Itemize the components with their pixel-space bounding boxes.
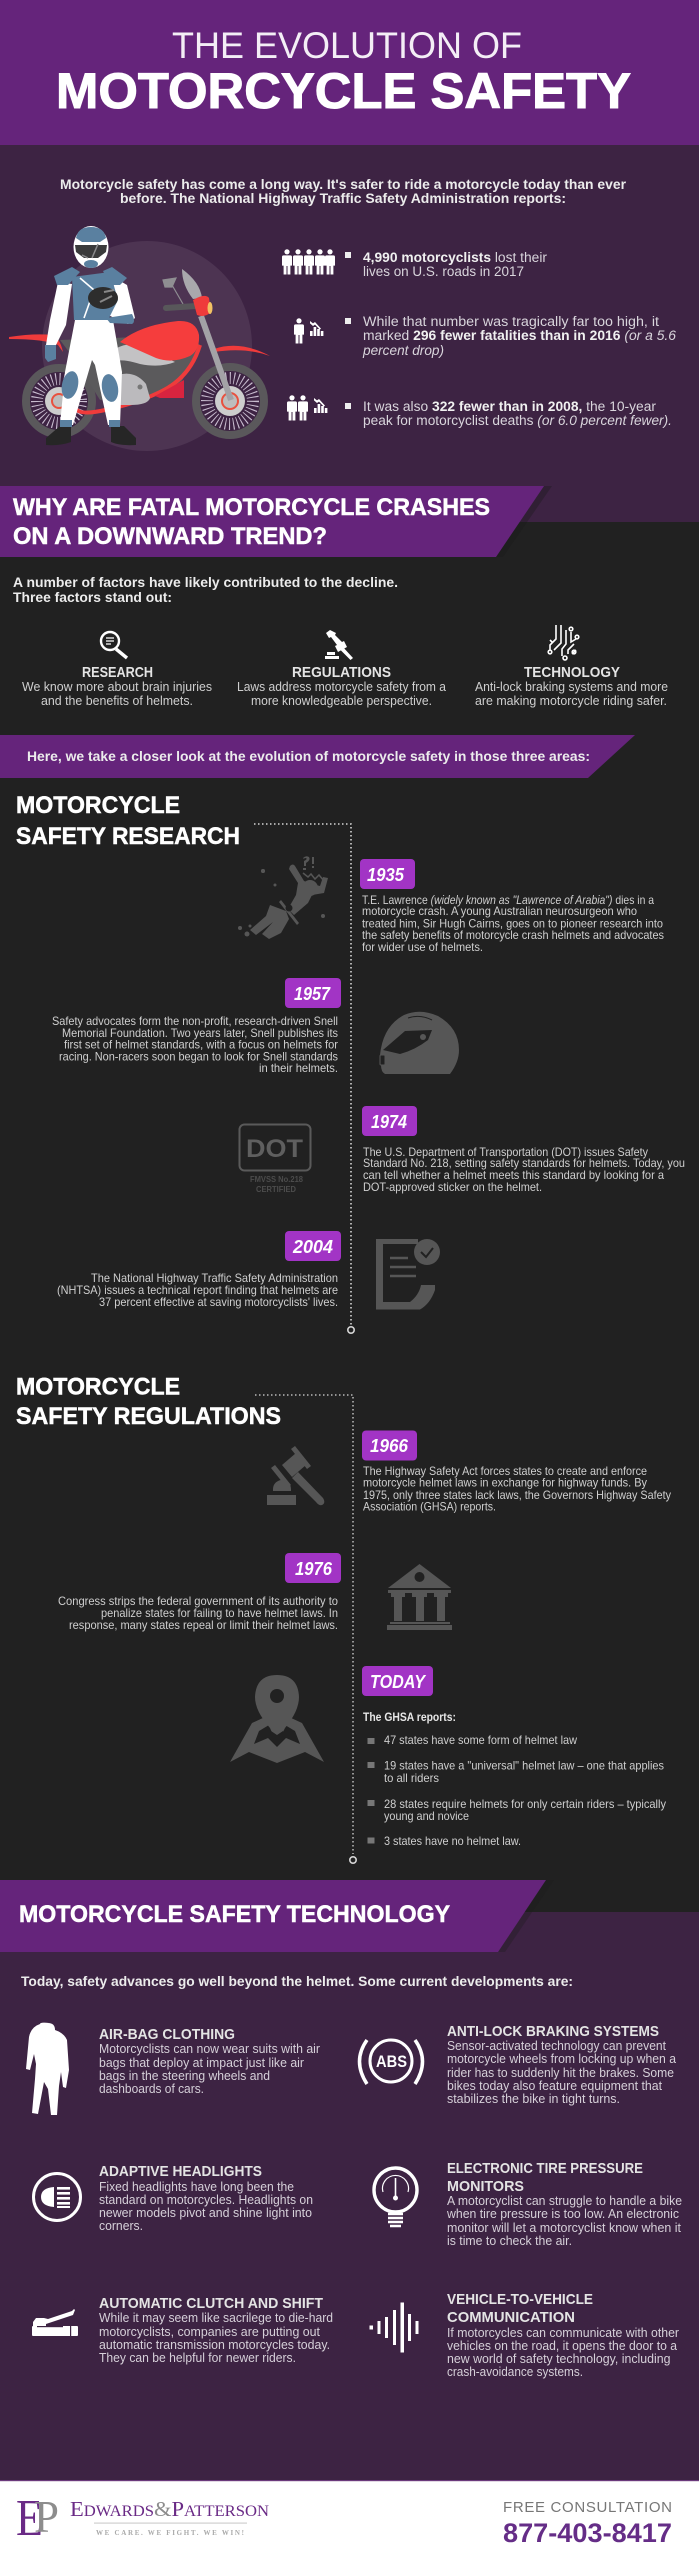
intro text: Motorcycle safety has come a long way. It's safer to ride a motorcycle today than ever	[60, 176, 627, 192]
bullet list: 47 states have some form of helmet law	[384, 1733, 577, 1747]
footer panel	[0, 2480, 699, 2560]
heading: motorcycle safety research	[16, 792, 240, 850]
icon: gavel	[325, 630, 353, 660]
handlebar	[166, 306, 196, 308]
logo: P	[34, 2491, 59, 2542]
icon: riding suit	[26, 2023, 69, 2115]
front fender	[214, 346, 270, 356]
icon: pressure gauge	[374, 2168, 417, 2226]
rider boots	[46, 426, 71, 445]
item: anti-lock braking systems: motorcycle wheels from locking up when a	[447, 2051, 677, 2066]
stat: 4,990 motorcyclists: lives on U.S. roads in 2017	[363, 264, 524, 279]
shoulders	[54, 267, 80, 285]
factor: regulations: Laws address motorcycle safety from a	[237, 680, 446, 694]
mirror	[163, 278, 183, 304]
bullet list: to all riders	[384, 1771, 439, 1785]
entry: 1966: Association (GHSA) reports.	[363, 1500, 496, 1514]
item: automatic clutch and shift: automatic transmission motorcycles today.	[99, 2337, 330, 2352]
contact	[503, 2499, 672, 2548]
heading: motorcycle safety regulations: MOTORCYCLE	[16, 1374, 180, 1400]
frame	[60, 335, 200, 400]
stat: 4,990 motorcyclists: 4,990 motorcyclists lost their	[363, 250, 548, 265]
research timeline line	[254, 824, 354, 1333]
item: vehicle-to-vehicle communication: If motorcycles can communicate with other	[447, 2325, 680, 2340]
logo: EDWARDS&PATTERSON	[70, 2497, 269, 2521]
entry: 1935: motorcycle crash. A young Australian neurosurgeon who	[362, 904, 637, 918]
banner: closer look: Here, we take a closer look at the evolution of motorcycle safety in those three areas:	[27, 748, 590, 764]
entry: 2004: 37 percent effective at saving motorcyclists' lives.	[99, 1295, 338, 1309]
windshield	[182, 269, 202, 299]
factor: research: and the benefits of helmets.	[41, 694, 193, 708]
factor: research: RESEARCH	[82, 664, 153, 681]
bullet list: 28 states require helmets for only certain riders – typically	[384, 1797, 666, 1811]
rider legs	[60, 320, 122, 425]
entry: 1957: first set of helmet standards, with a focus on helmets for	[64, 1038, 338, 1052]
item: adaptive headlights: ADAPTIVE HEADLIGHTS	[99, 2163, 262, 2180]
entry: today: TODAY	[370, 1672, 427, 1692]
entry: 1976	[58, 1553, 341, 1632]
icon: headlight	[34, 2174, 80, 2220]
icon: clutch lever	[32, 2309, 78, 2336]
left arm	[46, 282, 72, 345]
stat: 322 fewer than 2008	[287, 395, 672, 428]
heading: motorcycle safety research: MOTORCYCLE	[16, 792, 180, 819]
icon: ABS: ABS	[376, 2052, 407, 2071]
factor: technology	[475, 625, 668, 708]
item: electronic tire pressure monitors: ELECTRONIC TIRE PRESSURE	[447, 2160, 643, 2177]
icon: document with check	[376, 1239, 440, 1310]
entry: 1976: 1976	[295, 1559, 333, 1579]
heading: motorcycle safety research: SAFETY RESEARCH	[16, 823, 240, 850]
exhaust and red frame tube	[75, 345, 200, 413]
contact: 877-403-8417	[503, 2518, 672, 2548]
item: electronic tire pressure monitors: MONITORS	[447, 2178, 524, 2195]
logo: E	[16, 2490, 43, 2547]
icon: map pin	[230, 1675, 324, 1763]
logo	[16, 2490, 269, 2547]
item: air-bag clothing: AIR-BAG CLOTHING	[99, 2026, 235, 2043]
right arm	[108, 278, 135, 324]
logo: WE CARE. WE FIGHT. WE WIN!	[96, 2529, 244, 2537]
factor: technology: are making motorcycle riding safer.	[475, 694, 667, 708]
icon: gavel	[267, 1446, 324, 1505]
stat: 296 fewer fatalities	[294, 314, 676, 358]
item: anti-lock braking systems: bikes today also feature equipment that	[447, 2078, 662, 2093]
entry: 1966: 1975, only three states lack laws, the Governors Highway Safety	[363, 1488, 671, 1502]
banner: why are fatal crashes down: ON A DOWNWARD TREND?	[13, 523, 327, 550]
entry: 1935: the safety benefits of motorcycle crash helmets and advocates	[362, 928, 664, 942]
bullet list: 19 states have a "universal" helmet law – one that applies	[384, 1758, 664, 1772]
engine	[116, 374, 150, 405]
item: adaptive headlights: Fixed headlights have long been the	[99, 2179, 294, 2194]
icon: signal wave	[370, 2302, 418, 2352]
stat: 296 fewer fatalities: While that number was tragically far too high, it	[363, 314, 659, 329]
helmet	[74, 226, 108, 268]
forearm	[106, 314, 134, 324]
illustration: rider and motorcycle	[9, 226, 270, 451]
rear fender	[9, 334, 63, 352]
entry: 1976: response, many states repeal or limit their helmet laws.	[69, 1618, 338, 1632]
item: vehicle-to-vehicle communication: vehicles on the road, it opens the door to a	[447, 2338, 678, 2353]
item: electronic tire pressure monitors: monitor will let a motorcyclist know when it	[447, 2220, 681, 2235]
item: anti-lock braking systems: rider has to suddenly hit the brakes. Some	[447, 2065, 674, 2080]
factor: technology: Anti-lock braking systems and more	[475, 680, 668, 694]
knee pads	[59, 370, 81, 400]
item: electronic tire pressure monitors: when tire pressure is too low. An electronic	[446, 2206, 679, 2221]
bullet list: young and novice	[384, 1809, 469, 1823]
item: automatic clutch and shift: motorcyclists, companies are putting out	[99, 2324, 320, 2339]
icon: DOT sticker: FMVSS No.218	[250, 1175, 304, 1184]
icon: five people	[282, 249, 335, 274]
title line 2: MOTORCYCLE SAFETY	[56, 63, 631, 119]
item: adaptive headlights	[34, 2163, 313, 2233]
entry: 1957: Safety advocates form the non-profit, research-driven Snell	[52, 1014, 338, 1028]
stat: 322 fewer than 2008: peak for motorcyclist deaths (or 6.0 percent fewer).	[363, 413, 672, 428]
entry: 1974	[362, 1106, 685, 1194]
fuel tank	[120, 321, 199, 361]
entry: 1935: 1935	[367, 865, 405, 885]
item: electronic tire pressure monitors: is time to check the air.	[447, 2233, 572, 2248]
item: automatic clutch and shift	[32, 2295, 333, 2365]
torso	[72, 272, 118, 320]
factor: research: We know more about brain injuries	[22, 680, 212, 694]
item: air-bag clothing: bags in the steering wheels and	[99, 2068, 270, 2083]
entry: 1974: can tell whether a helmet meets this standard by looking for a	[363, 1168, 664, 1182]
banner: why are fatal crashes down	[0, 486, 552, 557]
intro text	[60, 176, 627, 206]
entry: today	[362, 1666, 666, 1848]
item: vehicle-to-vehicle communication	[370, 2291, 680, 2379]
entry: 1974: The U.S. Department of Transportation (DOT) issues Safety	[363, 1145, 648, 1159]
entry: 1935	[360, 859, 664, 954]
icon: two people with falling chart	[287, 395, 327, 420]
factor: regulations: more knowledgeable perspective.	[251, 694, 432, 708]
item: anti-lock braking systems: Sensor-activated technology can prevent	[447, 2038, 666, 2053]
item: automatic clutch and shift: AUTOMATIC CLUTCH AND SHIFT	[99, 2295, 323, 2312]
item: electronic tire pressure monitors	[374, 2160, 682, 2248]
item: anti-lock braking systems: stabilizes the bike in tight turns.	[447, 2091, 620, 2106]
icon: helmet	[380, 1012, 459, 1074]
entry: 1957: racing. Non-racers soon began to look for Snell standards	[59, 1050, 338, 1064]
background: dark timeline section	[0, 522, 699, 1912]
entry: 1966: 1966	[370, 1436, 409, 1456]
entry: 1966	[362, 1430, 671, 1514]
entry: 1974: DOT-approved sticker on the helmet.	[363, 1180, 542, 1194]
entry: 2004: The National Highway Traffic Safety Administration	[91, 1271, 338, 1285]
text: factors intro	[13, 574, 398, 605]
backdrop circle	[42, 241, 252, 451]
heading: motorcycle safety regulations: SAFETY REGULATIONS	[16, 1403, 281, 1430]
entry: 1966: The Highway Safety Act forces states to create and enforce	[363, 1464, 647, 1478]
item: air-bag clothing: bags that deploy at impact just like air	[99, 2055, 305, 2070]
item: vehicle-to-vehicle communication: VEHICLE-TO-VEHICLE	[447, 2291, 593, 2308]
entry: 1976: Congress strips the federal government of its authority to	[58, 1594, 338, 1608]
fork	[201, 316, 231, 400]
regulations timeline line	[255, 1395, 356, 1863]
held helmet	[88, 287, 118, 309]
headlight	[193, 296, 211, 316]
factor: technology: TECHNOLOGY	[524, 664, 620, 681]
stat: 4,990 motorcyclists	[282, 249, 548, 279]
factor: research	[22, 632, 212, 708]
icon: circuit	[548, 625, 579, 660]
entry: 1957	[52, 978, 341, 1075]
factor: regulations: REGULATIONS	[292, 664, 391, 681]
stat: 322 fewer than 2008: It was also 322 fewer than in 2008, the 10-year	[363, 399, 657, 414]
front wheel	[196, 367, 264, 435]
banner: closer look	[0, 735, 635, 778]
item: anti-lock braking systems: ANTI-LOCK BRAKING SYSTEMS	[447, 2023, 659, 2040]
contact: FREE CONSULTATION	[503, 2499, 672, 2516]
icon: crashing rider	[238, 856, 328, 939]
item: air-bag clothing: dashboards of cars.	[99, 2081, 204, 2096]
entry: 1957: in their helmets.	[259, 1061, 338, 1075]
entry: 1974: 1974	[371, 1112, 407, 1132]
item: vehicle-to-vehicle communication: crash-avoidance systems.	[447, 2364, 583, 2379]
icon: DOT sticker	[240, 1124, 310, 1194]
entry: 1966: motorcycle helmet laws in exchange for highway funds. By	[363, 1476, 647, 1490]
item: vehicle-to-vehicle communication: COMMUNICATION	[447, 2309, 575, 2326]
text: technology intro: Today, safety advances go well beyond the helmet. Some current developments are:	[21, 1973, 573, 1989]
entry: 2004	[57, 1231, 341, 1309]
item: air-bag clothing: Motorcyclists can now wear suits with air	[99, 2041, 321, 2056]
item: automatic clutch and shift: While it may seem like sacrilege to die-hard	[99, 2310, 333, 2325]
entry: 1976: penalize states for failing to have helmet laws. In	[101, 1606, 338, 1620]
icon: person with falling chart	[294, 318, 323, 344]
item: adaptive headlights: standard on motorcycles. Headlights on	[99, 2192, 313, 2207]
icon: magnifier	[101, 632, 127, 658]
entry: 2004: (NHTSA) issues a technical report finding that helmets are	[57, 1283, 338, 1297]
item: automatic clutch and shift: They can be helpful for newer riders.	[99, 2350, 296, 2365]
banner: why are fatal crashes down: WHY ARE FATAL MOTORCYCLE CRASHES	[13, 494, 490, 521]
icon: DOT sticker: CERTIFIED	[256, 1185, 296, 1194]
bullet list	[368, 1733, 666, 1848]
item: vehicle-to-vehicle communication: new world of safety technology, including	[447, 2351, 670, 2366]
entry: 1935: for wider use of helmets.	[362, 940, 483, 954]
background: technology section	[0, 1912, 699, 2480]
icon: government building	[387, 1564, 452, 1630]
entry: 1935: treated him, Sir Hugh Cairns, goes on to pioneer research into	[362, 916, 663, 930]
rear wheel	[26, 368, 92, 434]
icon: DOT sticker: DOT	[246, 1135, 303, 1163]
item: air-bag clothing	[26, 2023, 321, 2115]
entry: 1957: 1957	[294, 984, 331, 1004]
banner: motorcycle safety technology: MOTORCYCLE SAFETY TECHNOLOGY	[19, 1901, 450, 1928]
entry: today: The GHSA reports:	[363, 1710, 456, 1724]
text: factors intro: A number of factors have likely contributed to the decline.	[13, 574, 398, 590]
intro text: before. The National Highway Traffic Safety Administration reports:	[120, 190, 566, 206]
entry: 1957: Memorial Foundation. Two years later, Snell publishes its	[62, 1026, 338, 1040]
background: top purple section	[0, 145, 699, 525]
item: adaptive headlights: newer models pivot and shine light into	[99, 2205, 312, 2220]
text: factors intro: Three factors stand out:	[13, 589, 172, 605]
ankle bands	[60, 420, 120, 427]
stat: 296 fewer fatalities: marked 296 fewer fatalities than in 2016 (or a 5.6	[363, 328, 676, 343]
item: anti-lock braking systems	[360, 2023, 677, 2106]
icon: ABS	[360, 2040, 422, 2084]
item: adaptive headlights: corners.	[99, 2218, 143, 2233]
entry: 1935: T.E. Lawrence (widely known as "Lawrence of Arabia") dies in a	[362, 893, 654, 907]
header panel	[0, 0, 699, 145]
factor: regulations	[237, 630, 446, 708]
entry: 2004: 2004	[292, 1237, 333, 1257]
red belly panel	[155, 380, 184, 398]
banner: motorcycle safety technology	[0, 1880, 554, 1952]
item: electronic tire pressure monitors: A motorcyclist can struggle to handle a bike	[447, 2193, 682, 2208]
stat: 296 fewer fatalities: percent drop)	[362, 343, 444, 358]
heading: motorcycle safety regulations	[16, 1374, 281, 1430]
title line 1: THE EVOLUTION OF	[172, 25, 522, 66]
bullet list: 3 states have no helmet law.	[384, 1834, 521, 1848]
